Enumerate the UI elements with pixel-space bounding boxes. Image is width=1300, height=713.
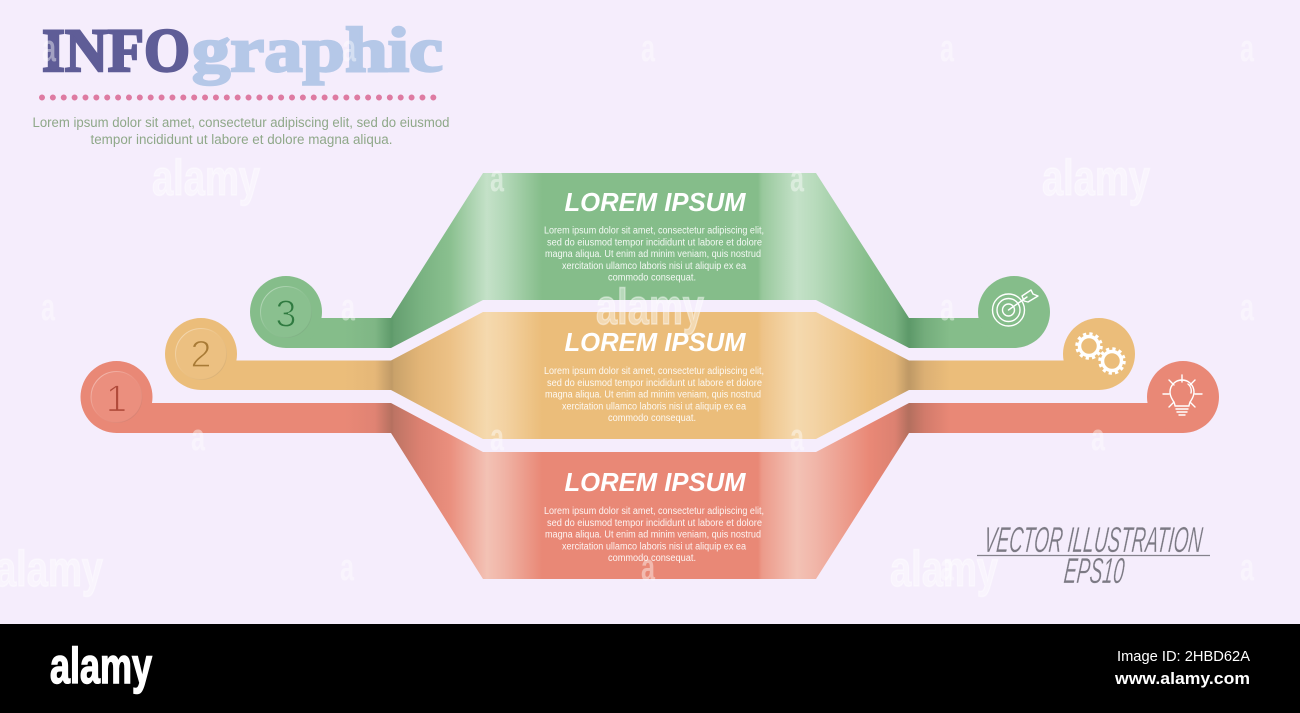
footer bar <box>0 624 1300 713</box>
watermarks: a <box>790 417 805 459</box>
watermarks: a <box>1240 547 1255 589</box>
watermarks: a <box>641 547 656 589</box>
watermarks: a <box>341 287 356 329</box>
title: graphic <box>192 15 443 85</box>
title: INFO <box>42 18 190 85</box>
icon: gears badge <box>1063 318 1135 390</box>
orange panel text: Lorem ipsum dolor sit amet, consectetur adipiscing elit, <box>544 366 764 377</box>
red panel heading: LOREM IPSUM <box>564 467 747 497</box>
orange panel text: sed do eiusmod tempor incididunt ut labore et dolore <box>547 378 762 389</box>
green number badge <box>250 276 322 348</box>
watermarks: a <box>1240 28 1255 70</box>
alamy logo: alamy <box>50 638 152 694</box>
green panel text: magna aliqua. Ut enim ad minim veniam, quis nostrud <box>545 249 761 260</box>
watermarks: a <box>340 547 355 589</box>
orange panel text <box>544 366 764 424</box>
green panel text <box>544 226 764 284</box>
website: www.alamy.com <box>1114 669 1250 688</box>
green ribbon and connector <box>286 173 1014 348</box>
watermarks: a <box>940 28 955 70</box>
panel: green band 3 <box>250 173 1050 348</box>
green panel text: commodo consequat. <box>608 273 696 284</box>
watermarks: alamy <box>890 541 998 597</box>
orange panel heading: LOREM IPSUM <box>564 327 747 357</box>
watermarks: a <box>191 417 206 459</box>
subtitle: Lorem ipsum dolor sit amet, consectetur adipiscing elit, sed do eiusmod <box>32 115 450 130</box>
subtitle: tempor incididunt ut labore et dolore magna aliqua. <box>90 132 392 147</box>
green panel text: xercitation ullamco laboris nisi ut aliquip ex ea <box>562 261 747 272</box>
subtitle <box>32 115 450 147</box>
watermarks: a <box>490 417 505 459</box>
red panel text: xercitation ullamco laboris nisi ut aliquip ex ea <box>562 541 747 552</box>
green number badge: 3 <box>275 294 297 336</box>
vector illustration caption <box>977 519 1210 591</box>
green panel text: sed do eiusmod tempor incididunt ut labore et dolore <box>547 237 762 248</box>
red number badge: 1 <box>106 378 127 420</box>
panel: orange band 2 <box>165 312 1135 439</box>
watermarks: a <box>490 158 505 200</box>
vector illustration caption: EPS10 <box>1062 550 1126 591</box>
watermarks: a <box>1091 417 1106 459</box>
image id: Image ID: 2HBD62A <box>1117 649 1250 665</box>
watermarks: a <box>790 158 805 200</box>
orange number badge: 2 <box>190 334 212 376</box>
green panel text: Lorem ipsum dolor sit amet, consectetur adipiscing elit, <box>544 226 764 236</box>
orange panel text: commodo consequat. <box>608 413 696 424</box>
orange panel text: xercitation ullamco laboris nisi ut aliquip ex ea <box>562 401 747 412</box>
watermarks: alamy <box>1042 150 1150 206</box>
watermarks: a <box>940 287 955 329</box>
orange ribbon and connector <box>201 312 1099 439</box>
watermarks: a <box>940 547 955 589</box>
red panel text: commodo consequat. <box>608 553 696 564</box>
red ribbon and connector <box>116 403 1183 579</box>
red number badge <box>80 361 152 433</box>
watermarks: a <box>41 287 56 329</box>
red panel text: sed do eiusmod tempor incididunt ut labore et dolore <box>547 518 762 529</box>
panel: red band 1 <box>80 361 1219 579</box>
dotted divider <box>42 94 434 100</box>
watermarks: alamy <box>152 150 260 206</box>
red panel text: Lorem ipsum dolor sit amet, consectetur adipiscing elit, <box>544 506 764 517</box>
orange panel text: magna aliqua. Ut enim ad minim veniam, quis nostrud <box>545 390 761 401</box>
watermarks <box>0 28 1255 597</box>
watermarks: a <box>641 28 656 70</box>
title <box>42 15 443 85</box>
watermarks: alamy <box>596 279 704 335</box>
green panel heading: LOREM IPSUM <box>564 187 747 217</box>
red panel text <box>544 506 764 564</box>
icon: target badge <box>978 276 1050 348</box>
orange number badge <box>165 318 237 390</box>
red panel text: magna aliqua. Ut enim ad minim veniam, quis nostrud <box>545 530 761 541</box>
watermarks: a <box>42 28 57 70</box>
watermarks: a <box>342 28 357 70</box>
watermarks: a <box>1240 287 1255 329</box>
icon: light bulb badge <box>1147 361 1219 433</box>
